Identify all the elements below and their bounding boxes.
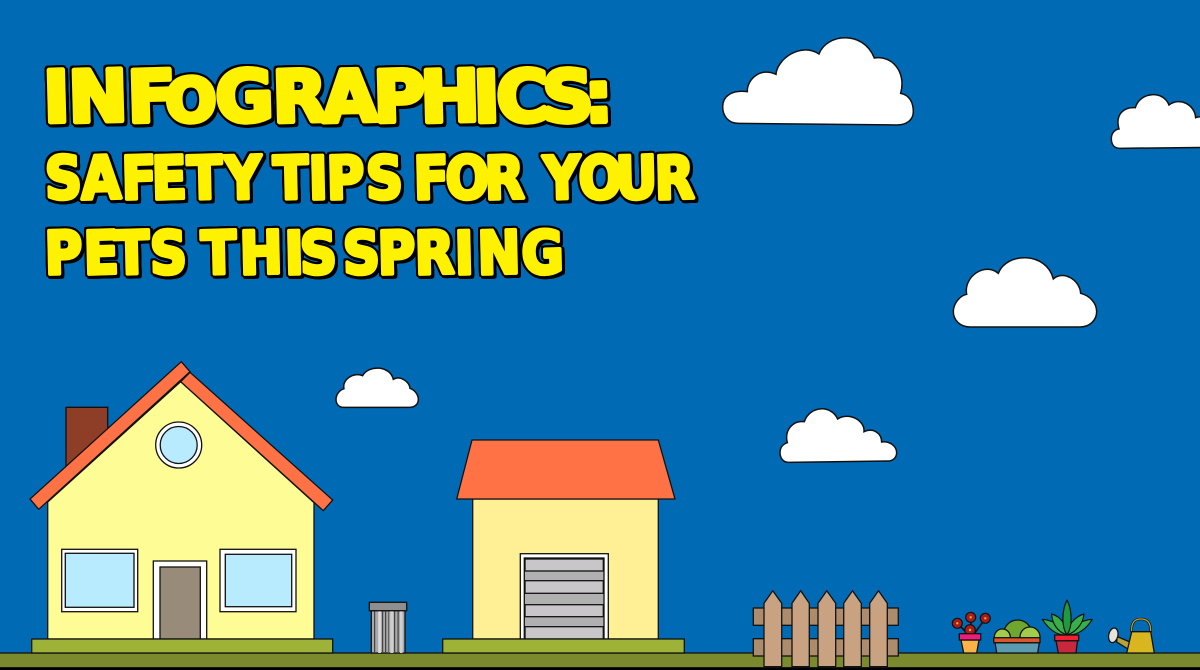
red pot: [1056, 641, 1078, 653]
planter rim: [994, 638, 1040, 643]
left window: [62, 549, 138, 612]
trash can: [369, 602, 407, 653]
can lid: [369, 602, 407, 611]
can body: [1127, 632, 1154, 653]
roof left: [30, 362, 190, 509]
house: [30, 362, 333, 653]
title line 1: O: [165, 66, 217, 137]
blue planter: [995, 643, 1039, 653]
handle: [1132, 619, 1151, 632]
round attic window: [156, 422, 202, 468]
flower pot: [952, 612, 990, 653]
title line 3: PETS THIS SPRING: [44, 219, 564, 289]
house wall: [48, 382, 314, 639]
shrub planter: [994, 620, 1040, 653]
orange pot: [961, 640, 979, 653]
fence rails: [753, 608, 898, 656]
can body: [371, 611, 405, 653]
pot rim: [1055, 635, 1079, 641]
garage lawn: [443, 639, 684, 653]
title line 2: SAFETY TIPS FOR YOUR: [44, 144, 695, 214]
cloud: middle right: [953, 258, 1097, 327]
pink rim: [959, 634, 981, 640]
door: [153, 561, 207, 639]
house lawn: [32, 639, 333, 653]
roof right: [181, 372, 333, 511]
garage: [443, 440, 684, 653]
fence pickets: [764, 591, 887, 667]
cloud: large top centre: [723, 38, 913, 125]
garage roof: [457, 440, 675, 499]
cloud: small above fence: [780, 409, 897, 462]
title: [42, 54, 695, 289]
title line 1: INF: [42, 54, 177, 139]
flowers: [952, 612, 990, 635]
garage wall: [473, 499, 658, 639]
cloud: small near house: [336, 368, 418, 407]
garage door: [520, 554, 608, 639]
leafy plant: [1042, 600, 1092, 653]
watering can: [1107, 619, 1154, 653]
chimney: [66, 407, 108, 468]
leaves: [1042, 600, 1092, 635]
sprinkler head: [1107, 627, 1119, 643]
ground: [0, 653, 1200, 668]
spout: [1117, 636, 1130, 649]
stems: [958, 618, 985, 634]
fence: [753, 591, 898, 667]
shrubs: [994, 620, 1040, 648]
cloud: top right: [1111, 95, 1200, 148]
right window: [220, 549, 296, 612]
title line 1: GRAPHICS:: [214, 54, 614, 139]
